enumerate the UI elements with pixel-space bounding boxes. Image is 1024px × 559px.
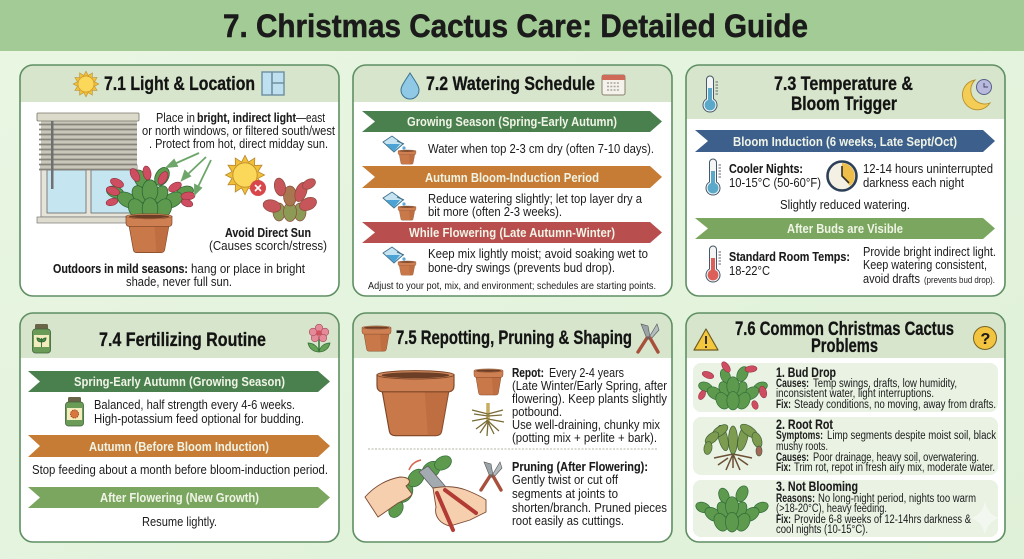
heading: 7.3: Bloom Trigger <box>791 94 897 115</box>
text: avoid direct sun: Avoid Direct Sun <box>225 225 311 240</box>
text: not blooming details: No long-night period, nights too warm <box>818 493 976 505</box>
illustration: window with blinds <box>37 113 139 223</box>
title banner: 7. Christmas Cactus Care: Detailed Guide <box>223 8 808 44</box>
item: not blooming <box>693 479 999 537</box>
panel: 7.6 common problems <box>686 313 1005 542</box>
text: not blooming details: Provide 6-8 weeks of 12-14hrs darkness & <box>794 514 971 526</box>
illustration: cactus dropping buds <box>697 360 769 411</box>
text: bud drop details: 1. Bud Drop <box>776 365 836 380</box>
text: balanced feed: Balanced, half strength every 4-6 weeks. <box>94 397 295 412</box>
icon: small pot <box>362 326 391 351</box>
heading: 7.5: 7.5 Repotting, Pruning & Shaping <box>396 328 632 349</box>
text: avoid direct sun <box>209 225 327 253</box>
heading: 7.6 <box>735 319 954 357</box>
text: repot: (Late Winter/Early Spring, after <box>512 378 668 393</box>
icon: sun <box>73 71 99 97</box>
text: outdoors <box>53 261 305 289</box>
text: autumn watering <box>428 191 643 219</box>
text: after buds care: (prevents bud drop). <box>924 275 995 285</box>
item: root rot <box>693 417 998 475</box>
ribbon: autumn bloom induction <box>362 166 662 188</box>
text: repot: flowering). Keep plants slightly <box>512 391 667 406</box>
heading: 7.6: Problems <box>811 336 878 357</box>
ribbon: growing season: Growing Season (Spring-Early Autumn) <box>407 114 617 129</box>
ribbon: while flowering <box>362 222 662 243</box>
illustration: cactus without blooms <box>694 484 770 533</box>
text: after buds care: Provide bright indirect light. <box>863 244 996 259</box>
text: flowering watering <box>428 246 648 275</box>
icon: watering can and pot <box>383 136 416 164</box>
heading: 7.2: 7.2 Watering Schedule <box>426 74 595 95</box>
text: root rot details: Poor drainage, heavy soil, overwatering. <box>813 452 979 464</box>
text: growing season watering: Water when top 2-3 cm dry (often 7-10 days). <box>428 141 654 156</box>
panel: 7.3 temperature and bloom trigger <box>686 65 1005 296</box>
item: bud drop <box>693 360 998 412</box>
illustration: scorched cactus <box>262 177 319 222</box>
text: not blooming details: Reasons: <box>776 493 815 505</box>
ribbon: growing season feed <box>28 371 330 392</box>
illustration: roots <box>472 403 504 436</box>
ribbon: growing season feed: Spring-Early Autumn (Growing Season) <box>74 374 285 389</box>
icon: calendar <box>602 75 625 95</box>
text: not blooming details <box>776 479 976 536</box>
text: autumn watering: bit more (often 2-3 weeks). <box>428 204 562 219</box>
icon: warm thermometer <box>706 246 721 282</box>
icon: pink flower <box>308 324 330 352</box>
text: autumn watering: Reduce watering slightly; let top layer dry a <box>428 191 643 206</box>
ribbon: while flowering: While Flowering (Late Autumn-Winter) <box>409 225 615 240</box>
text: after buds care: Keep watering consistent, <box>863 257 987 272</box>
text: cooler nights <box>729 161 821 190</box>
text: stop feeding: Stop feeding about a month before bloom-induction period. <box>32 462 328 477</box>
text: outdoors: Outdoors in mild seasons: <box>53 261 188 276</box>
icon: watering can and pot <box>383 247 416 275</box>
text: repot: Every 2-4 years <box>549 365 624 380</box>
illustration: cactus with rotting roots <box>703 422 764 470</box>
panel: 7.1 light and location <box>20 65 339 296</box>
ribbon: growing season <box>362 111 662 132</box>
text: darkness: 12-14 hours uninterrupted <box>863 161 993 176</box>
text: cooler nights: 10-15°C (50-60°F) <box>729 175 821 190</box>
ribbon: after buds visible: After Buds are Visible <box>787 221 903 236</box>
ribbon: autumn bloom induction: Autumn Bloom-Induction Period <box>425 170 599 185</box>
text: after buds care <box>863 244 996 286</box>
icon: small shears <box>481 462 502 490</box>
text: placement guidance: . Protect from hot, direct midday sun. <box>149 136 328 151</box>
icon: fertilizer jar <box>32 324 50 353</box>
text: reduced watering: Slightly reduced watering. <box>780 197 910 212</box>
title banner <box>0 0 1024 51</box>
illustration: potted flowering cactus <box>105 165 195 253</box>
text: pruning: segments at joints to <box>512 486 618 501</box>
text: placement guidance: bright, indirect light <box>197 110 297 125</box>
icon: clock <box>828 162 856 190</box>
text: placement guidance <box>142 110 335 151</box>
text: root rot details: Symptoms: <box>776 430 823 442</box>
text: not blooming details: 3. Not Blooming <box>776 479 858 494</box>
text: root rot details <box>776 417 996 474</box>
panel: 7.5 repotting pruning shaping <box>353 313 672 542</box>
icon: avoid direct sun <box>225 155 266 196</box>
text: pruning: root easily as cuttings. <box>512 513 624 528</box>
text: bud drop details: Temp swings, drafts, low humidity, <box>813 378 957 390</box>
text: avoid direct sun: (Causes scorch/stress) <box>209 238 327 253</box>
ribbon: autumn feed: Autumn (Before Bloom Induction) <box>89 439 269 454</box>
heading: 7.1: 7.1 Light & Location <box>104 74 255 95</box>
text: pruning: Pruning (After Flowering): <box>512 459 648 474</box>
text: root rot details: mushy roots. <box>776 441 828 453</box>
icon: warning triangle <box>694 329 718 350</box>
text: not blooming details: (>18-20°C), heavy feeding. <box>776 503 887 515</box>
text: repot <box>512 365 668 445</box>
text: not blooming details: Fix: <box>776 514 791 526</box>
panel: 7.2 watering schedule <box>353 65 672 296</box>
text: flowering watering: Keep mix lightly moist; avoid soaking wet to <box>428 246 648 261</box>
icon: window <box>262 72 284 95</box>
text: placement guidance: or north windows, or filtered south/west <box>142 123 335 138</box>
text: standard room temps: Standard Room Temps: <box>729 249 850 264</box>
illustration: smaller pot <box>474 369 503 395</box>
text: standard room temps: 18-22°C <box>729 263 770 278</box>
icon: water drop <box>401 73 419 99</box>
text: repot: Repot: <box>512 365 544 380</box>
heading: 7.6: 7.6 Common Christmas Cactus <box>735 319 954 340</box>
illustration: large pot <box>377 371 454 436</box>
arrows: light direction <box>167 153 211 194</box>
text: darkness <box>863 161 993 190</box>
text: repot: Use well-draining, chunky mix <box>512 417 660 432</box>
text: root rot details: 2. Root Rot <box>776 417 833 432</box>
text: cooler nights: Cooler Nights: <box>729 161 803 176</box>
icon: flower fertilizer jar <box>66 397 84 426</box>
text: resume lightly: Resume lightly. <box>142 514 217 529</box>
text: placement guidance: Place in <box>156 110 195 125</box>
text: after buds care: avoid drafts <box>863 271 920 286</box>
text: pruning: shorten/branch. Pruned pieces <box>512 500 667 515</box>
text: outdoors: hang or place in bright <box>191 261 305 276</box>
ribbon: autumn feed <box>28 435 330 457</box>
text: root rot details: Fix: <box>776 462 791 474</box>
text: darkness: darkness each night <box>863 175 964 190</box>
text: not blooming details: cool nights (10-15°C). <box>776 524 868 536</box>
icon: shears <box>638 324 659 352</box>
ribbon: after flowering feed <box>28 487 330 508</box>
heading: 7.3: 7.3 Temperature & <box>774 74 913 95</box>
icon: thermometer <box>703 76 718 112</box>
text: outdoors: shade, never full sun. <box>126 274 232 289</box>
text: bud drop details: Fix: <box>776 399 791 411</box>
text: bud drop details: inconsistent water, light interruptions. <box>776 388 934 400</box>
text: bud drop details: Causes: <box>776 378 809 390</box>
text: balanced feed: High-potassium feed optional for budding. <box>94 411 304 426</box>
icon: question bubble: ? <box>980 331 990 348</box>
text: pruning: Gently twist or cut off <box>512 472 618 487</box>
text: repot: potbound. <box>512 404 562 419</box>
ribbon: bloom induction: Bloom Induction (6 weeks, Late Sept/Oct) <box>733 134 957 149</box>
text: repot: (potting mix + perlite + bark). <box>512 430 657 445</box>
ribbon: after buds visible <box>695 218 995 239</box>
icon: moon and clock <box>962 80 992 110</box>
icon: watering can and pot <box>383 192 416 220</box>
illustration: hands pruning cactus <box>365 453 486 530</box>
text: bud drop details <box>776 365 996 411</box>
text: root rot details: Causes: <box>776 452 809 464</box>
footnote: Adjust to your pot, mix, and environment; schedules are starting points. <box>368 280 656 292</box>
icon: question bubble <box>974 326 996 350</box>
text: balanced feed <box>94 397 304 426</box>
heading: 7.3 <box>774 74 913 115</box>
ribbon: bloom induction <box>695 130 995 152</box>
heading: 7.4: 7.4 Fertilizing Routine <box>99 330 266 351</box>
text: pruning <box>512 459 667 528</box>
icon: cool thermometer <box>706 159 721 195</box>
text: standard room temps <box>729 249 850 278</box>
text: flowering watering: bone-dry swings (prevents bud drop). <box>428 260 615 275</box>
panel: 7.4 fertilizing routine <box>20 313 339 542</box>
ribbon: after flowering feed: After Flowering (New Growth) <box>100 490 259 505</box>
text: root rot details: Limp segments despite moist soil, black <box>827 430 996 442</box>
text: placement guidance: —east <box>296 110 325 125</box>
